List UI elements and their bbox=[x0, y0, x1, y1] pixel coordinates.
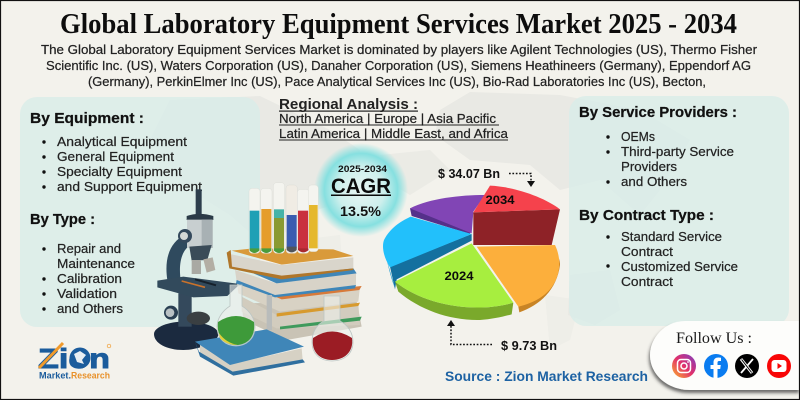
By Service Providers list: Third-party Service bbox=[621, 144, 734, 159]
callout: 2024 value bbox=[447, 320, 557, 353]
panel: follow us bbox=[650, 321, 800, 390]
callout: 2034 value bbox=[438, 167, 535, 187]
callout: 2034 value: $ 34.07 Bn bbox=[438, 167, 500, 181]
icon: youtube bbox=[767, 354, 791, 378]
icon: X bbox=[735, 354, 759, 378]
CAGR badge bbox=[314, 143, 408, 237]
Regional Analysis bbox=[279, 97, 509, 141]
By Type list: By Type : bbox=[30, 211, 95, 228]
By Type list: Repair and bbox=[57, 241, 121, 256]
Regional Analysis: North America | Europe | Asia Pacific bbox=[279, 111, 496, 126]
By Equipment list: Specialty Equipment bbox=[57, 164, 182, 179]
follow us heading: Follow Us : bbox=[676, 330, 752, 347]
By Contract Type list: Contract bbox=[621, 274, 673, 289]
By Equipment list: General Equipment bbox=[57, 149, 174, 164]
blue book bbox=[195, 329, 305, 376]
By Service Providers list: Providers bbox=[621, 159, 677, 174]
microscope illustration bbox=[154, 189, 240, 350]
By Contract Type list: Customized Service bbox=[621, 259, 738, 274]
Regional Analysis: Regional Analysis : bbox=[279, 97, 418, 113]
icon: instagram bbox=[672, 354, 696, 378]
By Type list: Validation bbox=[57, 286, 117, 301]
Regional Analysis: Latin America | Middle East, and Africa bbox=[279, 126, 509, 141]
By Type list: Calibration bbox=[57, 271, 122, 286]
By Service Providers list bbox=[579, 104, 737, 189]
logo: Zion Market Research: Market. bbox=[39, 370, 71, 382]
By Type list bbox=[30, 211, 135, 316]
source line: Source : Zion Market Research bbox=[445, 368, 648, 384]
logo: Zion Market Research: Zion bbox=[38, 343, 110, 374]
CAGR badge: 2025-2034 bbox=[338, 164, 388, 175]
intro text bbox=[41, 43, 757, 89]
logo: Zion Market Research: Research bbox=[71, 370, 110, 382]
stack of books with test tubes bbox=[227, 183, 362, 340]
test tubes bbox=[249, 183, 318, 253]
slice: blue bbox=[383, 217, 472, 289]
slice: green bbox=[395, 243, 513, 320]
By Service Providers list: By Service Providers : bbox=[579, 104, 737, 121]
CAGR badge: CAGR bbox=[331, 175, 391, 198]
By Service Providers list: and Others bbox=[621, 174, 687, 189]
slice: red bbox=[473, 186, 560, 245]
By Type list: Maintenance bbox=[57, 256, 135, 271]
intro text: The Global Laboratory Equipment Services Market is dominated by players like Agilent Technologies (US), Thermo Fisher bbox=[41, 43, 757, 57]
By Service Providers list: OEMs bbox=[621, 129, 655, 144]
slice: orange bbox=[477, 245, 560, 312]
slice: purple bbox=[410, 195, 485, 234]
logo: Zion Market Research bbox=[38, 343, 111, 382]
green flask bbox=[217, 285, 255, 346]
By Equipment list bbox=[30, 110, 202, 194]
panel: right segments bbox=[569, 96, 789, 326]
By Contract Type list bbox=[579, 207, 738, 289]
intro text: Scientific Inc. (US), Waters Corporation (US), Danaher Corporation (US), Siemens Heathineers (Germany), Eppendorf AG bbox=[46, 59, 751, 73]
By Contract Type list: Standard Service bbox=[621, 229, 722, 244]
callout: 2024 value: $ 9.73 Bn bbox=[501, 339, 557, 353]
title: Global Laboratory Equipment Services Market 2025 - 2034 bbox=[60, 8, 737, 40]
By Contract Type list: Contract bbox=[621, 244, 673, 259]
By Type list: and Others bbox=[57, 301, 123, 316]
By Equipment list: By Equipment : bbox=[30, 110, 144, 127]
By Equipment list: and Support Equipment bbox=[57, 179, 202, 194]
intro text: (Germany), PerkinElmer Inc (US), Pace Analytical Services Inc (US), Bio-Rad Laboratories Inc (US), Becton, bbox=[88, 75, 706, 89]
world map backdrop bbox=[150, 92, 690, 350]
By Contract Type list: By Contract Type : bbox=[579, 207, 714, 224]
panel: left segments bbox=[20, 97, 260, 327]
red flask bbox=[312, 296, 353, 361]
pie label 2024: 2024 bbox=[444, 269, 474, 283]
pie label 2034: 2034 bbox=[486, 193, 515, 207]
icon: facebook bbox=[704, 354, 728, 378]
By Equipment list: Analytical Equipment bbox=[57, 134, 187, 149]
3D pie chart bbox=[383, 186, 560, 320]
CAGR badge: 13.5% bbox=[340, 203, 382, 219]
